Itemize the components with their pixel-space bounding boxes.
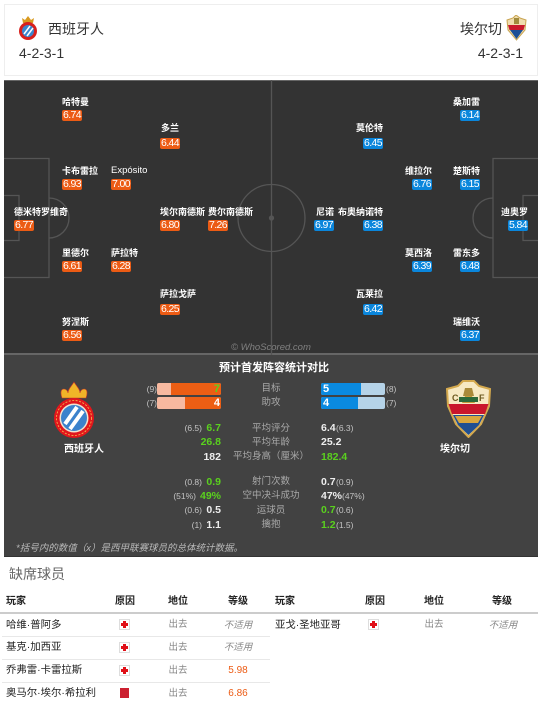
player: 布奥纳诺特: 6.38 (364, 219, 382, 231)
stat baselines and labels: 目标 (261, 383, 280, 394)
icon: Espanyol crest large (54, 382, 94, 438)
player: 迪奥罗 (501, 207, 528, 231)
away team label: 埃尔切 (440, 444, 470, 455)
player: 哈特曼 (62, 97, 89, 121)
stat baselines and labels: (0.6) (336, 505, 353, 515)
player: 努涅斯: 6.56 (63, 329, 81, 341)
player: 莫西洛: 莫西洛 (405, 248, 432, 258)
watermark: © WhoScored.com (231, 342, 311, 353)
row: 亚戈·圣地亚哥: 不适用 (489, 620, 517, 631)
player: 莫西洛: 6.39 (413, 260, 431, 272)
table: missing players, home (0, 612, 538, 683)
stat baselines and labels: 0.9 (206, 476, 221, 488)
stat baselines and labels: (8) (386, 384, 396, 394)
stat baselines and labels: 1.2 (321, 519, 336, 531)
player: 迪奥罗: 迪奥罗 (501, 207, 528, 217)
away formation: 4-2-3-1 (478, 45, 523, 61)
icon: Elche crest large (446, 380, 491, 438)
stat baselines and labels: 空中决斗成功 (242, 490, 300, 501)
stat baselines and labels: 1.1 (206, 519, 221, 531)
bar: home assists (157, 397, 221, 409)
table headers: 等级 (492, 596, 512, 607)
stat baselines and labels: 6.4 (321, 422, 336, 434)
home team label: 西班牙人 (64, 444, 104, 455)
player: 维拉尔: 维拉尔 (405, 166, 432, 176)
player: 楚斯特 (453, 166, 480, 190)
stat baselines and labels: (6.5) (185, 423, 202, 433)
row: 哈维·普阿多: 出去 (168, 619, 188, 630)
player: 卡布雷拉: 6.93 (63, 178, 81, 190)
heading: missing players: 缺席球员 (9, 566, 65, 582)
stat baselines and labels: (6.3) (336, 423, 353, 433)
stat baselines and labels: 助攻 (261, 397, 280, 408)
stat baselines and labels: 182.4 (321, 451, 347, 463)
home team name: 西班牙人 (48, 21, 104, 37)
player: 瓦莱拉: 瓦莱拉 (356, 289, 383, 299)
player: 萨拉戈萨: 6.25 (161, 303, 179, 315)
player: 楚斯特: 楚斯特 (453, 166, 480, 176)
player: 布奥纳诺特: 布奥纳诺特 (338, 207, 383, 217)
stat baselines and labels: (9) (147, 384, 157, 394)
stat baselines and labels: 47% (321, 490, 342, 502)
stat baselines and labels: (51%) (173, 491, 196, 501)
player: 雷东多: 雷东多 (453, 248, 480, 258)
player: 费尔南德斯 (208, 207, 253, 231)
home formation: 4-2-3-1 (19, 45, 64, 61)
player: 萨拉特: 萨拉特 (111, 248, 138, 258)
stat baselines and labels: (0.8) (185, 477, 202, 487)
header: match teams and formations (4, 4, 538, 76)
player: 布奥纳诺特 (338, 207, 383, 231)
player: 里德尔 (62, 248, 89, 272)
player: 卡布雷拉 (62, 166, 98, 190)
bar: away assists: 4 (323, 397, 329, 409)
player: 维拉尔: 6.76 (413, 178, 431, 190)
row: 奥马尔·埃尔·希拉利: 出去 (168, 688, 188, 699)
stat baselines and labels: 0.7 (321, 476, 336, 488)
stat baselines and labels: 运球员 (257, 505, 285, 516)
stat baselines and labels: 平均年龄 (252, 437, 290, 448)
bar: home goals (157, 383, 221, 395)
pitch markings (4, 80, 538, 355)
player: 桑加雷: 6.14 (461, 109, 479, 121)
player: 里德尔: 6.61 (63, 260, 81, 272)
row: 亚戈·圣地亚哥: 亚戈·圣地亚哥 (275, 620, 341, 631)
panel: lineup stats comparison (4, 355, 538, 557)
row: 乔弗雷·卡雷拉斯: 出去 (168, 665, 188, 676)
stat baselines and labels: 49% (200, 490, 221, 502)
player: 楚斯特: 6.15 (461, 178, 479, 190)
player: 瑞维沃: 瑞维沃 (453, 317, 480, 327)
stat baselines and labels: 射门次数 (252, 476, 290, 487)
row: 亚戈·圣地亚哥 (275, 618, 518, 631)
player: 莫伦特: 莫伦特 (356, 123, 383, 133)
stat baselines and labels: 182 (203, 451, 221, 463)
row: 基克·加西亚: 不适用 (224, 642, 252, 653)
row: 基克·加西亚: 基克·加西亚 (6, 642, 61, 653)
player: 德米特罗维奇 (14, 207, 68, 231)
player: 萨拉戈萨 (160, 288, 196, 315)
row: 哈维·普阿多 (6, 618, 253, 631)
player: 瑞维沃 (453, 317, 480, 341)
player: 埃尔南德斯: 6.80 (161, 219, 179, 231)
player: 努涅斯: 努涅斯 (62, 317, 89, 327)
player: Expósito: Expósito (111, 165, 147, 176)
stat baselines and labels: 0.5 (206, 504, 221, 516)
player: 维拉尔 (405, 166, 432, 190)
row: 哈维·普阿多: 不适用 (224, 620, 252, 631)
icon: Espanyol crest small (19, 16, 37, 40)
stat baselines and labels: 平均身高（厘米） (233, 451, 309, 462)
player: 萨拉特 (111, 248, 138, 272)
player: 里德尔: 里德尔 (62, 248, 89, 258)
player: 迪奥罗: 5.84 (509, 219, 527, 231)
bar: home assists: 4 (214, 397, 220, 409)
player: 莫伦特: 6.45 (364, 137, 382, 149)
player: 多兰: 多兰 (161, 123, 179, 133)
player: 哈特曼: 6.74 (63, 109, 81, 121)
player: 雷东多: 6.48 (461, 260, 479, 272)
player: 德米特罗维奇: 6.77 (15, 219, 33, 231)
bar: away goals (321, 383, 385, 395)
player: 桑加雷 (453, 97, 480, 121)
row: 基克·加西亚 (6, 641, 253, 653)
player: Expósito: 7.00 (112, 178, 130, 190)
icon: Elche crest small (506, 15, 526, 41)
stat baselines and labels: (0.6) (185, 505, 202, 515)
table headers: 等级 (228, 596, 248, 607)
icon: Elche crest large: F (479, 393, 485, 403)
row: 奥马尔·埃尔·希拉利 (6, 687, 248, 699)
player: 雷东多 (453, 248, 480, 272)
stat baselines and labels: 26.8 (201, 436, 221, 448)
player: 卡布雷拉: 卡布雷拉 (62, 166, 98, 176)
player: 瑞维沃: 6.37 (461, 329, 479, 341)
table headers: 玩家 (275, 596, 295, 607)
player: 埃尔南德斯: 埃尔南德斯 (160, 207, 205, 217)
table headers: 地位 (424, 596, 444, 607)
stat baselines and labels: (1.5) (336, 520, 353, 530)
player: 瓦莱拉: 6.42 (364, 303, 382, 315)
icon: Elche crest large: C (452, 393, 459, 403)
bar: away goals: 5 (323, 383, 329, 395)
row: 奥马尔·埃尔·希拉利: 奥马尔·埃尔·希拉利 (6, 688, 96, 699)
player: 多兰 (160, 123, 180, 149)
stat baselines and labels: (1) (192, 520, 202, 530)
row: 哈维·普阿多: 哈维·普阿多 (6, 620, 61, 631)
stat baselines and labels: 25.2 (321, 436, 341, 448)
player: 埃尔南德斯 (160, 207, 205, 231)
stat baselines and labels: (7) (147, 398, 157, 408)
stat baselines and labels: (7) (386, 398, 396, 408)
away team name: 埃尔切 (460, 21, 502, 37)
row: 乔弗雷·卡雷拉斯: 5.98 (228, 665, 248, 676)
row: 乔弗雷·卡雷拉斯 (6, 664, 248, 676)
stat baselines and labels: 0.7 (321, 504, 336, 516)
panel: pitch with lineups (4, 80, 538, 355)
stat baselines and labels (147, 382, 396, 531)
table headers: 原因 (365, 596, 385, 607)
player: 尼诺: 尼诺 (316, 207, 334, 217)
stat baselines and labels: 6.7 (206, 422, 221, 434)
player: Expósito (111, 165, 147, 190)
player: 桑加雷: 桑加雷 (453, 97, 480, 107)
bar: home goals: 7 (214, 383, 220, 395)
player: 费尔南德斯: 费尔南德斯 (208, 207, 253, 217)
row: 奥马尔·埃尔·希拉利: 6.86 (228, 688, 248, 699)
player: 瓦莱拉 (356, 288, 383, 315)
table headers: 玩家 (6, 596, 26, 607)
player: 多兰: 6.44 (161, 137, 179, 149)
stats title: 预计首发阵容统计对比 (219, 362, 329, 374)
stat baselines and labels: 平均评分 (252, 423, 290, 434)
footnote: *括号内的数值（x）是西甲联赛球员的总体统计数据。 (16, 543, 243, 554)
player: 哈特曼: 哈特曼 (62, 97, 89, 107)
player: 费尔南德斯: 7.26 (209, 219, 227, 231)
player: 尼诺: 6.97 (315, 219, 333, 231)
player: 萨拉戈萨: 萨拉戈萨 (160, 289, 196, 299)
row: 基克·加西亚: 出去 (168, 642, 188, 653)
player: 德米特罗维奇: 德米特罗维奇 (14, 207, 68, 217)
player: 莫西洛 (405, 248, 432, 272)
bar: away assists (321, 397, 385, 409)
table headers: 地位 (168, 596, 188, 607)
stat baselines and labels: (0.9) (336, 477, 353, 487)
stat baselines and labels: (47%) (342, 491, 365, 501)
player: 萨拉特: 6.28 (112, 260, 130, 272)
player: 莫伦特 (356, 123, 383, 149)
row: 亚戈·圣地亚哥: 出去 (424, 619, 444, 630)
table headers: 原因 (115, 596, 135, 607)
player: 尼诺 (314, 207, 334, 231)
stat baselines and labels: 擒抱 (261, 519, 280, 530)
row: 乔弗雷·卡雷拉斯: 乔弗雷·卡雷拉斯 (6, 665, 82, 676)
player: 努涅斯 (62, 317, 89, 341)
